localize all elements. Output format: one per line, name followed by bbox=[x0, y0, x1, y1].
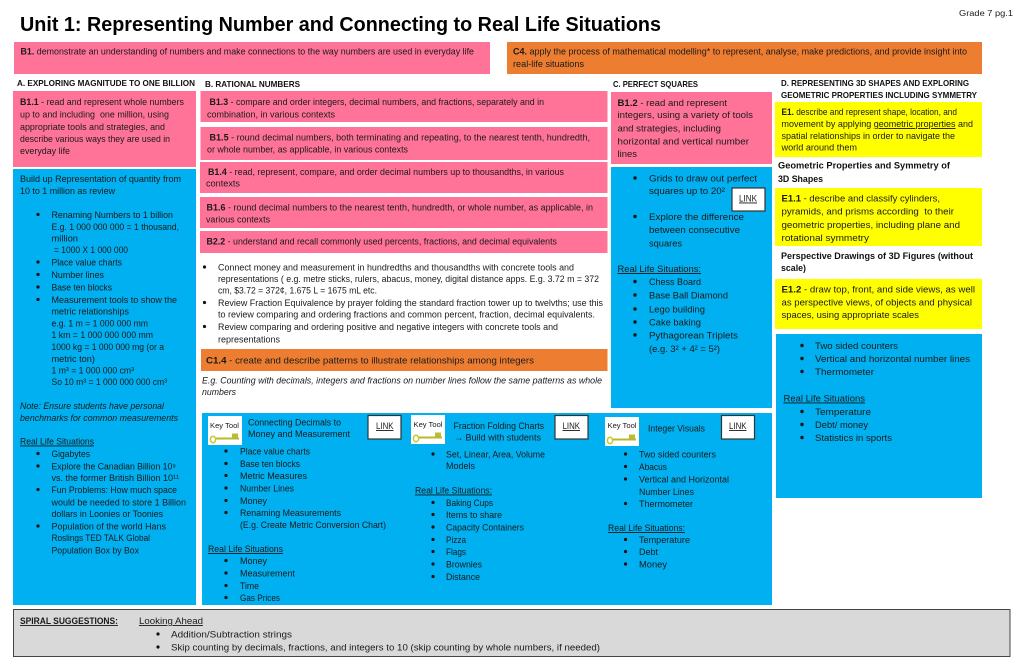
bullet list: teaching notes bbox=[203, 262, 603, 344]
blue panel: column C content: Cake baking bbox=[649, 318, 701, 328]
link button bbox=[368, 416, 401, 439]
list: integer tools bbox=[624, 450, 729, 509]
bullet list: teaching notes: Review comparing and ordering positive and negative integers with concrete tools and bbox=[218, 322, 558, 332]
blue panel: column C content: between consecutive bbox=[649, 225, 740, 236]
tool title: Connecting Decimals to bbox=[248, 418, 341, 428]
link button: LINK bbox=[739, 194, 757, 204]
blue panel: column A content: Explore the Canadian Billion 10⁹ bbox=[52, 462, 176, 472]
panel: spiral suggestions: SPIRAL SUGGESTIONS: bbox=[20, 616, 118, 626]
list: integer real life situations bbox=[608, 523, 690, 570]
list: fraction models: Models bbox=[446, 461, 475, 471]
blue panel: column D content: Thermometer bbox=[815, 367, 874, 377]
column C: perfect squares bbox=[611, 79, 772, 408]
blue panel: column A content: = 1000 X 1 000 000 bbox=[54, 245, 128, 255]
list: fraction real life situations: Baking Cups bbox=[446, 498, 493, 508]
blue panel: key tools bbox=[202, 413, 772, 605]
blue panel: column A content bbox=[13, 169, 196, 605]
pink box: B1.2 bbox=[611, 92, 772, 164]
yellow box: E1.2 bbox=[775, 279, 982, 329]
icon: key tool bbox=[605, 417, 639, 446]
yellow box: E1: E1. describe and represent shape, location, and bbox=[782, 107, 957, 117]
blue panel: column A content: million bbox=[52, 234, 78, 244]
blue panel: column A content: 1000 kg = 1 000 000 mg (or a bbox=[52, 342, 164, 352]
list: integer real life situations: Debt bbox=[639, 547, 658, 557]
list: decimal real life situations: Time bbox=[240, 581, 259, 591]
blue panel: column A content: Roslings TED TALK Global bbox=[52, 533, 150, 543]
icon: key tool bbox=[208, 416, 242, 445]
list: decimal real life situations bbox=[208, 544, 295, 603]
blue panel: column A content: Real Life Situations bbox=[20, 436, 94, 446]
key tool group: integers bbox=[605, 416, 754, 570]
tool title: Fraction Folding Charts bbox=[454, 421, 544, 431]
list: integer real life situations: Temperature bbox=[639, 535, 690, 545]
tool title: → Build with students bbox=[454, 432, 541, 442]
blue panel: column A content: Note: Ensure students have personal bbox=[20, 401, 165, 411]
pink box: B1.4: B1.4 - read, represent, compare, and order decimal numbers up to thousandths, in various bbox=[208, 167, 564, 177]
bullet list: teaching notes: Connect money and measurement in hundredths and thousandths with concrete tools and bbox=[218, 262, 574, 272]
yellow box: E1.1: E1.1 - describe and classify cylinders, bbox=[782, 194, 940, 204]
list: decimal real life situations: Measurement bbox=[240, 568, 295, 578]
link button: LINK bbox=[562, 421, 580, 431]
tool title bbox=[454, 421, 544, 442]
list: fraction real life situations: Distance bbox=[446, 572, 480, 582]
blue panel: column A content: benchmarks for common measurements bbox=[20, 413, 178, 423]
pink box: B1.5: B1.5 - round decimal numbers, both terminating and repeating, to the nearest tenth, hundredth, bbox=[210, 132, 590, 142]
list: integer tools: Vertical and Horizontal bbox=[639, 474, 729, 484]
blue panel: column C content: (e.g. 3² + 4² = 5²) bbox=[649, 344, 720, 355]
blue panel: column C content bbox=[611, 167, 772, 408]
list: decimal real life situations: Real Life Situations bbox=[208, 544, 283, 554]
blue panel: column C content: Grids to draw out perfect bbox=[649, 174, 757, 184]
pink box: B1.6 bbox=[200, 197, 608, 228]
blue panel: column A content: Measurement tools to show the bbox=[52, 295, 177, 305]
blue panel: column A content: Gigabytes bbox=[52, 449, 90, 459]
title: Unit 1: Representing Number and Connecting to Real Life Situations bbox=[20, 13, 661, 36]
blue panel: column A content: Base ten blocks bbox=[52, 282, 112, 292]
blue panel: column D content: Two sided counters bbox=[815, 341, 899, 351]
panel: spiral suggestions bbox=[14, 610, 1010, 656]
panel: overall expectation B1 bbox=[14, 42, 490, 74]
bullet list: teaching notes: Review Fraction Equivalence by prayer folding the standard fraction tower up to twelvths; use this bbox=[218, 298, 603, 308]
pink box: B1.1: appropriate tools and strategies, and bbox=[20, 122, 165, 132]
list: integer real life situations: Money bbox=[639, 560, 668, 570]
column D: 3D shapes bbox=[775, 78, 982, 498]
list: fraction real life situations: Capacity Containers bbox=[446, 522, 524, 532]
list: decimal real life situations: Money bbox=[240, 556, 267, 566]
pink box: B1.5 bbox=[200, 127, 608, 160]
bullet list: teaching notes: to review comparing and ordering fractions and common percent, fraction, decimal equivalents. bbox=[218, 310, 595, 320]
pink box: B1.1: up to and including one million, using bbox=[20, 110, 169, 120]
tool title bbox=[248, 418, 350, 439]
blue panel: column A content: E.g. 1 000 000 000 = 1 thousand, bbox=[52, 222, 179, 232]
pink box: B1.2: integers, using a variety of tools bbox=[618, 110, 753, 121]
yellow box: E1: spatial relationships in order to navigate the bbox=[782, 131, 955, 141]
bullet list: teaching notes: representations bbox=[218, 334, 280, 344]
panel: overall expectation C4: C4. apply the process of mathematical modelling* to represent, analyse, make predictions, and provide insight into bbox=[513, 46, 967, 56]
yellow box: E1: movement by applying geometric properties and bbox=[782, 119, 973, 129]
blue panel: column A content: metric ton) bbox=[52, 354, 95, 364]
subheading: perspective drawings: Perspective Drawings of 3D Figures (without bbox=[781, 251, 973, 261]
list: decimal tools: Place value charts bbox=[240, 446, 310, 456]
list: integer tools: Abacus bbox=[639, 462, 667, 472]
heading: column B: B. RATIONAL NUMBERS bbox=[205, 79, 300, 89]
icon: key tool: Key Tool bbox=[414, 420, 443, 429]
list: integer real life situations: Real Life Situations: bbox=[608, 523, 685, 533]
subheading: geometric properties: 3D Shapes bbox=[778, 174, 823, 184]
blue panel: column A content: 1 km = 1 000 000 000 mm bbox=[52, 330, 153, 340]
key tool group: decimals bbox=[208, 416, 401, 603]
heading: column D bbox=[781, 78, 977, 100]
pink box: B1.1: describe various ways they are used in bbox=[20, 134, 170, 144]
subheading: geometric properties: Geometric Properties and Symmetry of bbox=[778, 160, 951, 170]
pink box: B1.2: horizontal and vertical number bbox=[618, 136, 750, 148]
blue panel: column C content: Chess Board bbox=[649, 277, 701, 288]
blue panel: column D content: Temperature bbox=[815, 407, 871, 417]
blue panel: column A content: Population of the world Hans bbox=[52, 522, 166, 532]
list: fraction real life situations: Pizza bbox=[446, 535, 466, 545]
pink box: B1.1: everyday life bbox=[20, 146, 70, 156]
panel: spiral suggestions: Addition/Subtraction strings bbox=[171, 630, 293, 640]
panel: overall expectation C4: real-life situations bbox=[513, 59, 585, 69]
heading: column D: GEOMETRIC PROPERTIES INCLUDING SYMMETRY bbox=[781, 90, 977, 100]
list: fraction real life situations: Items to share bbox=[446, 510, 502, 520]
heading: column A: A. EXPLORING MAGNITUDE TO ONE BILLION bbox=[17, 78, 195, 88]
list: decimal tools: Money bbox=[240, 496, 267, 506]
blue panel: column A content: e.g. 1 m = 1 000 000 mm bbox=[52, 318, 148, 328]
column A: exploring magnitude bbox=[13, 78, 196, 605]
blue panel: column C content: squares up to 20² bbox=[649, 186, 726, 197]
panel: overall expectation C4 bbox=[507, 42, 982, 74]
blue panel: column A content: Fun Problems: How much space bbox=[52, 485, 177, 495]
yellow box: E1.1: geometric properties, including plane and bbox=[782, 220, 960, 230]
italic example note: E.g. Counting with decimals, integers and fractions on number lines follow the same patterns as whole bbox=[202, 376, 602, 386]
panel: spiral suggestions: Looking Ahead bbox=[139, 616, 203, 626]
blue panel: column C content: Base Ball Diamond bbox=[649, 290, 728, 302]
blue panel: column A content: vs. the former British Billion 10¹¹ bbox=[52, 473, 179, 483]
link button bbox=[732, 188, 765, 211]
yellow box: E1 bbox=[775, 102, 982, 157]
subheading: perspective drawings bbox=[781, 251, 973, 273]
yellow box: E1.2: as perspective views, of objects and physical bbox=[782, 298, 972, 308]
blue panel: column C content: Lego building bbox=[649, 304, 705, 316]
blue panel: column A content: dollars in Loonies or Toonies bbox=[52, 509, 163, 519]
pink box: B1.2: lines bbox=[618, 149, 637, 160]
pink box: B1.3: B1.3 - compare and order integers, decimal numbers, and fractions, separately and in bbox=[210, 97, 544, 107]
blue panel: column A content: 1 m³ = 1 000 000 cm³ bbox=[52, 366, 134, 376]
blue panel: column A content: Build up Representation of quantity from bbox=[20, 174, 181, 184]
list: fraction real life situations bbox=[415, 486, 524, 582]
key tool group: fractions bbox=[411, 415, 588, 582]
subheading: geometric properties bbox=[778, 160, 951, 184]
heading: column C: C. PERFECT SQUARES bbox=[613, 79, 698, 89]
pink box: B1.2: and strategies, including bbox=[618, 124, 721, 134]
blue panel: column A content: 10 to 1 million as review bbox=[20, 186, 115, 196]
list: decimal tools: (E.g. Create Metric Conversion Chart) bbox=[240, 520, 386, 530]
list: decimal tools bbox=[224, 446, 386, 530]
blue panel: column A content: Population Box by Box bbox=[52, 546, 139, 556]
icon: key tool: Key Tool bbox=[608, 421, 637, 430]
list: integer tools: Two sided counters bbox=[639, 450, 716, 460]
list: fraction models bbox=[431, 450, 545, 471]
list: decimal real life situations: Gas Prices bbox=[240, 593, 280, 603]
bullet list: teaching notes: cm, $3.72 = 372¢, 1.675 L = 1675 mL etc. bbox=[218, 286, 377, 296]
blue panel: column A content: Renaming Numbers to 1 billion bbox=[52, 210, 173, 220]
blue panel: column C content: Pythagorean Triplets bbox=[649, 330, 738, 342]
list: decimal tools: Number Lines bbox=[240, 484, 294, 494]
list: integer tools: Thermometer bbox=[639, 499, 693, 509]
tool title: Money and Measurement bbox=[248, 429, 350, 439]
bullet list: teaching notes: representations ( e.g. metre sticks, rulers, abacus, money, digital distance apps. E.g. 3.72 m = 372 bbox=[218, 274, 599, 284]
list: fraction real life situations: Flags bbox=[446, 547, 466, 557]
list: integer tools: Number Lines bbox=[639, 487, 694, 497]
list: fraction real life situations: Brownies bbox=[446, 560, 482, 570]
blue panel: column D content: Debt/ money bbox=[815, 420, 869, 430]
orange box: C1.4: C1.4 - create and describe patterns to illustrate relationships among integers bbox=[206, 356, 534, 366]
blue panel: column C content: Real Life Situations: bbox=[618, 264, 701, 275]
orange box: C1.4 bbox=[201, 349, 608, 371]
blue panel: column A content: Place value charts bbox=[52, 258, 122, 268]
pink box: B1.3 bbox=[200, 91, 608, 122]
yellow box: E1.1: pyramids, and prisms according to their bbox=[782, 206, 954, 216]
blue panel: column A content: So 10 m³ = 1 000 000 000 cm³ bbox=[52, 377, 167, 387]
subheading: perspective drawings: scale) bbox=[781, 263, 806, 273]
pink box: B1.6: B1.6 - round decimal numbers to the nearest tenth, hundredth, or whole number, as applicable, in bbox=[206, 202, 593, 212]
link button bbox=[555, 416, 588, 439]
pink box: B1.1: B1.1 - read and represent whole numbers bbox=[20, 97, 184, 107]
pink box: B1.6: various contexts bbox=[206, 214, 270, 224]
blue panel: column C content: Explore the difference bbox=[649, 212, 744, 223]
icon: key tool bbox=[411, 415, 445, 444]
list: decimal tools: Base ten blocks bbox=[240, 459, 300, 469]
list: fraction real life situations: Real Life Situations: bbox=[415, 486, 492, 496]
link button: LINK bbox=[376, 421, 394, 431]
yellow box: E1.2: spaces, using appropriate scales bbox=[782, 310, 920, 320]
icon: key tool: Key Tool bbox=[210, 421, 239, 430]
pink box: B1.4: contexts bbox=[206, 178, 240, 188]
link button bbox=[722, 416, 754, 439]
heading: column D: D. REPRESENTING 3D SHAPES AND EXPLORING bbox=[781, 78, 969, 88]
blue panel: column D content: Vertical and horizontal number lines bbox=[815, 354, 971, 364]
italic example note: numbers bbox=[202, 387, 236, 397]
pink box: B1.4 bbox=[200, 162, 608, 193]
blue panel: column D content: Real Life Situations bbox=[784, 394, 866, 404]
blue panel: column A content: would be needed to store 1 Billion bbox=[51, 498, 186, 508]
yellow box: E1: world around them bbox=[780, 142, 857, 152]
italic example note bbox=[202, 376, 602, 397]
panel: spiral suggestions: Skip counting by decimals, fractions, and integers to 10 (skip counting by whole numbers, if needed) bbox=[171, 642, 600, 652]
pink box: B1.2: B1.2 - read and represent bbox=[618, 98, 727, 109]
blue panel: column C content: squares bbox=[649, 238, 682, 250]
blue panel: column D content: Statistics in sports bbox=[815, 433, 893, 443]
blue panel: column A content: metric relationships bbox=[52, 306, 129, 316]
tool title: Integer Visuals bbox=[648, 424, 705, 434]
yellow box: E1.1 bbox=[775, 188, 982, 246]
pink box: B1.1 bbox=[13, 91, 196, 167]
blue panel: column D content bbox=[776, 334, 982, 498]
pink box: B1.5: or whole number, as applicable, in various contexts bbox=[207, 144, 408, 154]
yellow box: E1.1: rotational symmetry bbox=[782, 233, 870, 243]
list: fraction models: Set, Linear, Area, Volume bbox=[446, 450, 545, 460]
pink box: B2.2 bbox=[200, 231, 608, 253]
pink box: B1.3: combination, in various contexts bbox=[207, 110, 335, 120]
list: decimal tools: Renaming Measurements bbox=[240, 508, 341, 518]
blue panel: column A content: Number lines bbox=[52, 270, 104, 280]
pink box: B2.2: B2.2 - understand and recall commonly used percents, fractions, and decimal equivalents bbox=[206, 236, 557, 246]
panel: overall expectation B1: B1. demonstrate an understanding of numbers and make connections to the way numbers are used in everyday life bbox=[20, 46, 474, 56]
link button: LINK bbox=[729, 421, 746, 431]
yellow box: E1.2: E1.2 - draw top, front, and side views, as well bbox=[782, 284, 975, 294]
column B: rational numbers bbox=[200, 79, 608, 397]
page number: Grade 7 pg.1 bbox=[959, 8, 1013, 18]
list: decimal tools: Metric Measures bbox=[240, 471, 308, 481]
